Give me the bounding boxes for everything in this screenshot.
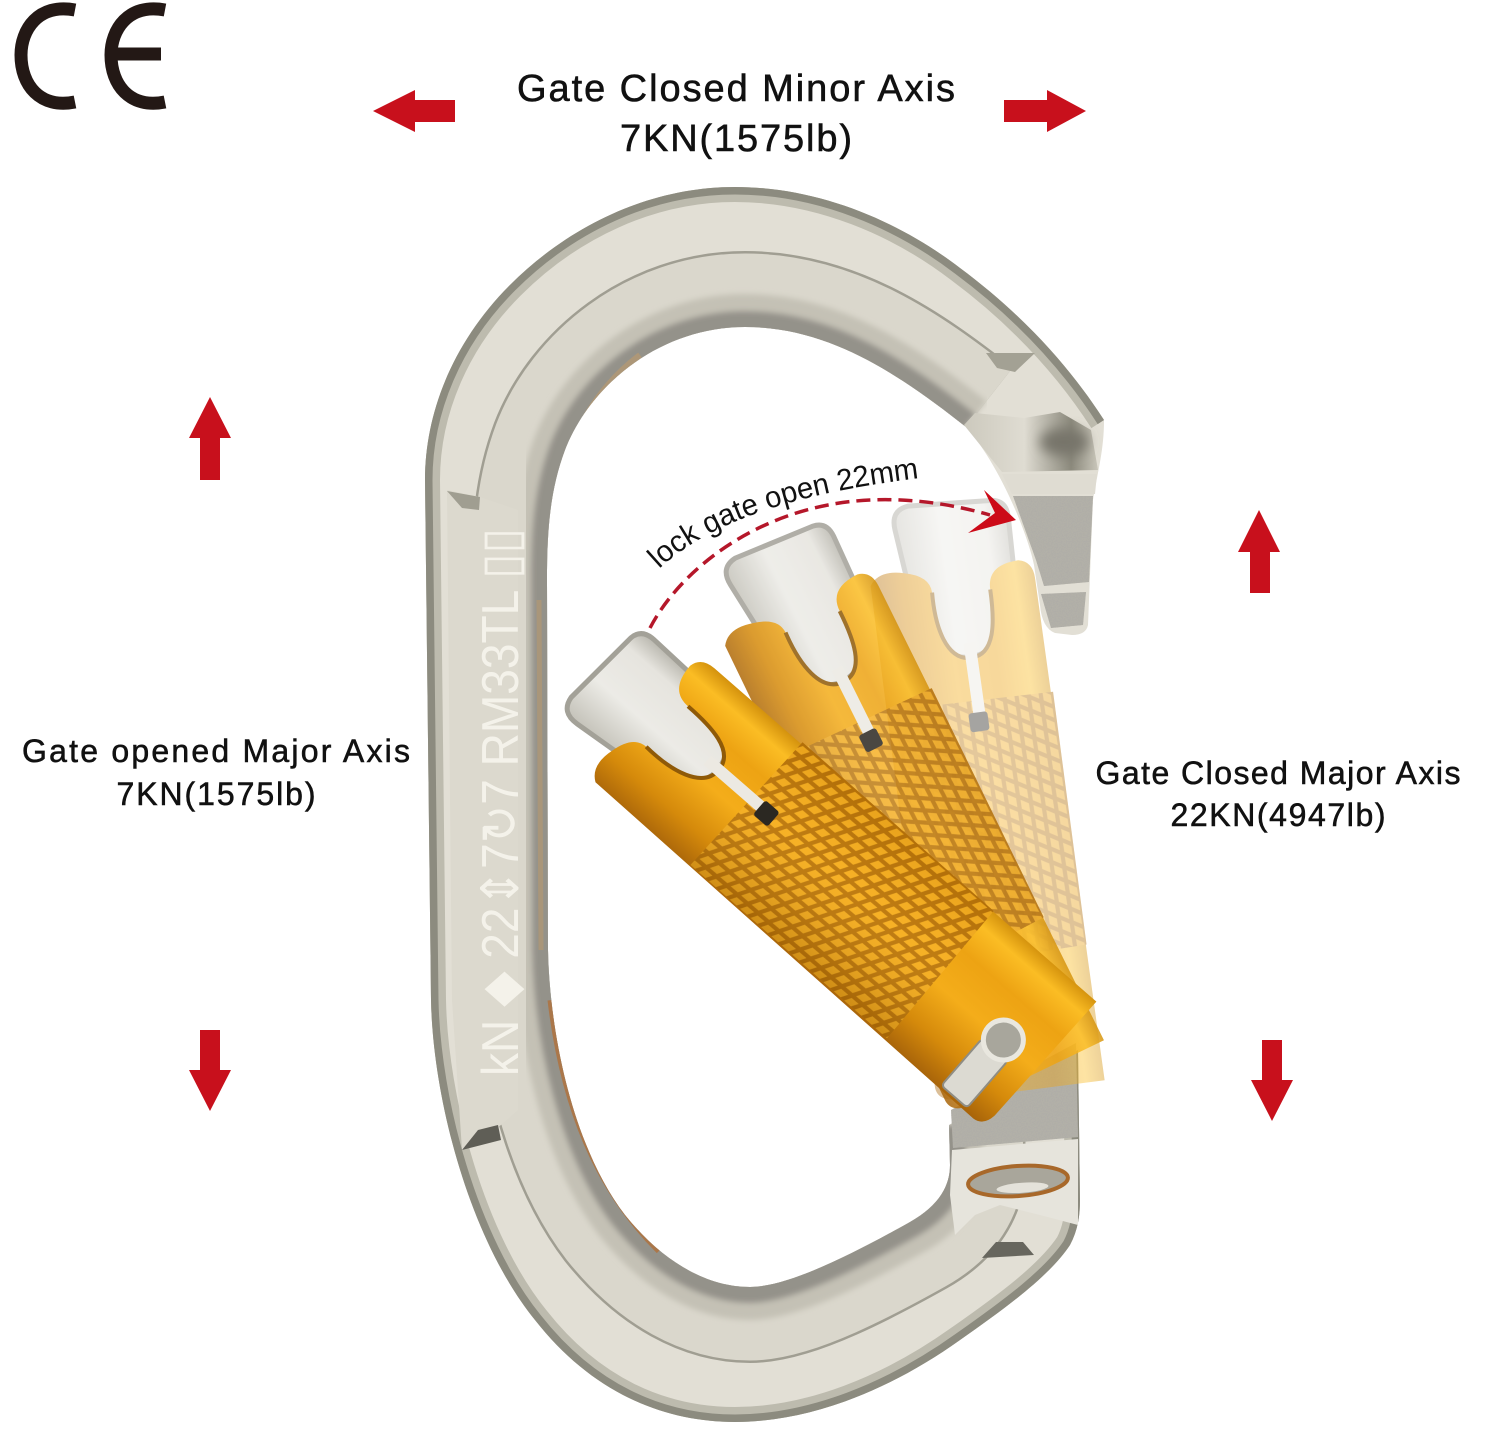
label: gate opened major axis (22, 733, 410, 812)
label: gate opened major axis: Gate opened Major Axis (22, 733, 410, 769)
nose: dark reflection (1040, 428, 1088, 456)
lower catch: knurled plate (951, 1043, 1078, 1148)
nose: knurled plate (1013, 496, 1093, 586)
arrow: opened major axis down (189, 1030, 231, 1111)
label: gate closed major axis (1096, 755, 1460, 833)
arrow: minor axis left (373, 90, 455, 132)
arrow: closed major axis up (1238, 510, 1280, 593)
nose: reflective hook (964, 412, 1098, 472)
lower catch: oval recess (967, 1163, 1069, 1199)
arrow: minor axis right (1004, 90, 1086, 132)
stamped markings: kN ◆ 22⇕7↻7 RM33TL ▯▯ (472, 528, 530, 1076)
carabiner body (415, 180, 1115, 1429)
arrow: opened major axis up (189, 397, 231, 480)
dashed opening arc (650, 500, 990, 628)
gate: fully open, foreground (536, 608, 1098, 1129)
notch: lower left (462, 1125, 501, 1150)
arrow: closed major axis down (1251, 1040, 1293, 1121)
arc arrowhead (968, 490, 1016, 533)
nose: knurled tip (1041, 592, 1086, 628)
heading: gate closed minor axis: Gate Closed Minor Axis (517, 68, 955, 110)
CE certification mark (21, 9, 165, 103)
label: gate opened major axis: 7KN(1575lb) (116, 776, 316, 812)
gate hinge clip (941, 1039, 1008, 1108)
notch: top left (447, 491, 480, 510)
heading: gate closed minor axis: 7KN(1575lb) (620, 118, 852, 160)
heading: gate closed minor axis (517, 68, 955, 160)
notch: lower right (982, 1242, 1034, 1258)
label: gate closed major axis: 22KN(4947lb) (1170, 797, 1386, 833)
gate: faded closed position (854, 490, 1108, 1104)
lower catch: bright band (950, 1139, 1078, 1235)
notch: upper right (986, 353, 1035, 372)
label: gate closed major axis: Gate Closed Major Axis (1096, 755, 1460, 791)
arc label: lock gate open 22mm (646, 462, 918, 568)
stamped panel (447, 490, 518, 1150)
gate hinge pin (975, 1012, 1032, 1068)
gate: middle position (687, 506, 1107, 1116)
nose: light strip (1002, 474, 1097, 494)
